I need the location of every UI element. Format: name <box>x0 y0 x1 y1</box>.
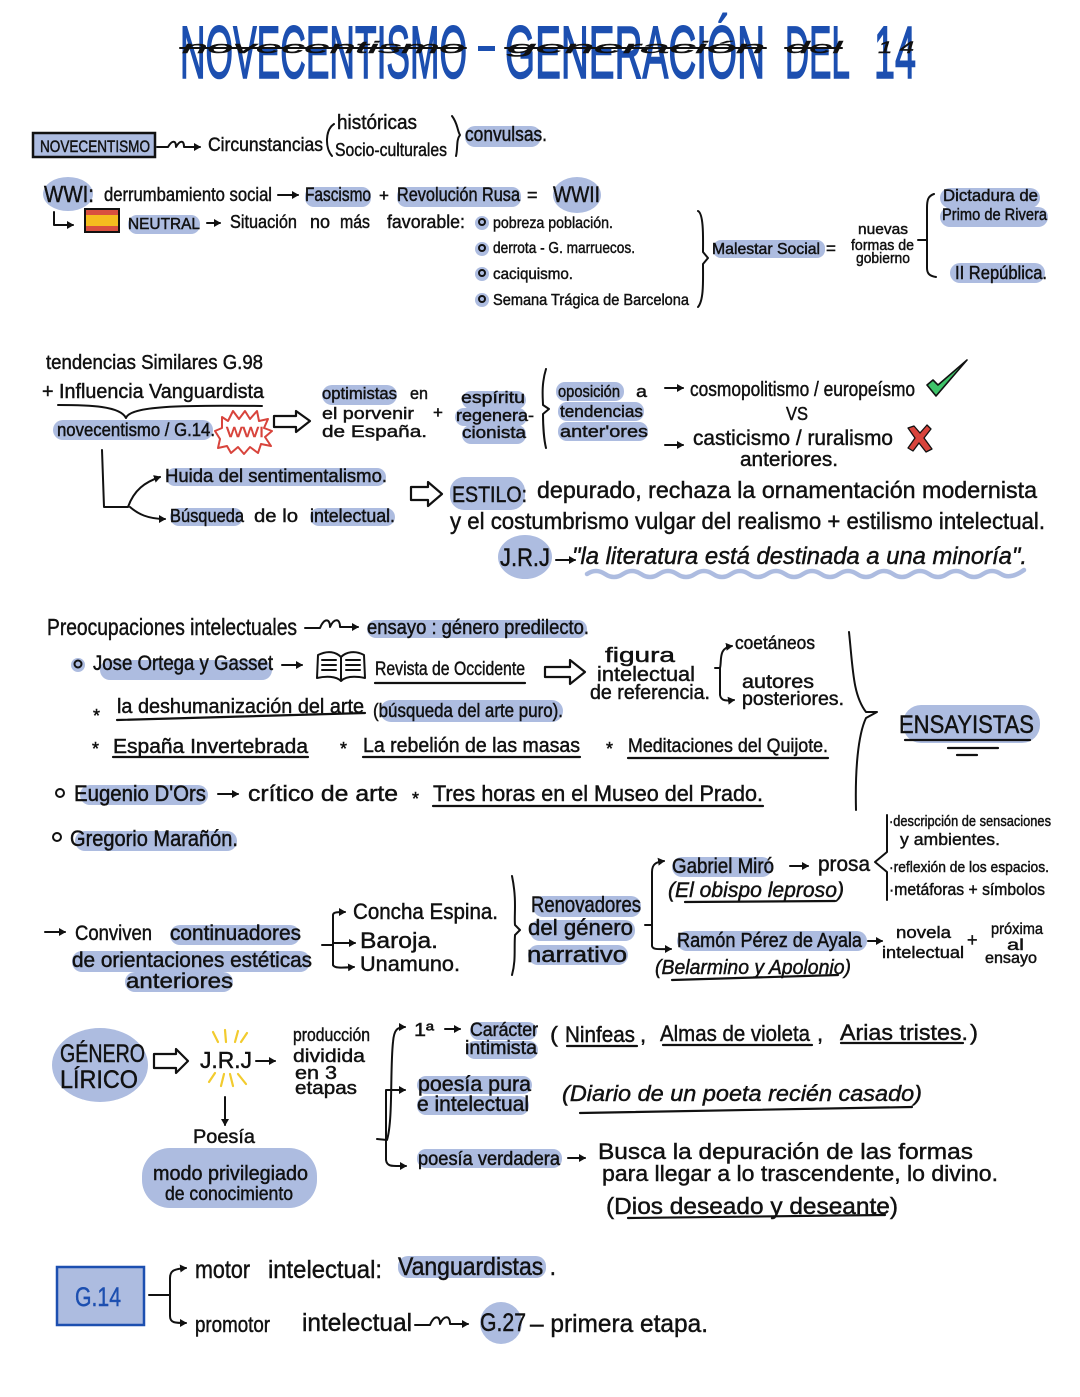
highlighted text: dictadura de primo de rivera <box>940 186 1048 227</box>
title: NOVECENTISMO <box>180 11 467 94</box>
text: critico de arte: crítico de arte <box>248 781 398 806</box>
arrow: to critico <box>218 793 238 795</box>
arrow: down to neutral <box>54 212 73 225</box>
text: circunstancias: Circunstancias <box>208 135 323 156</box>
highlighted text: busqueda del arte puro: (búsqueda del arte puro). <box>373 701 563 722</box>
label box: novecentismo: NOVECENTISMO <box>40 137 150 156</box>
highlighted text: convulsas: convulsas. <box>465 124 547 146</box>
highlighted text: WWII: WWII <box>553 182 600 207</box>
panel: novecentismo circumstances <box>33 112 547 160</box>
text: tendencias similares: tendencias Similares G.98 <box>46 352 263 374</box>
panel: genero lirico <box>52 1020 998 1219</box>
highlighted text: ramon perez de ayala: Ramón Pérez de Ayala <box>677 930 863 952</box>
highlighted text: busqueda: Búsqueda <box>170 506 245 526</box>
bracket: renovadores <box>512 876 520 975</box>
highlighted text: oposicion a tendencias anteriores: tendencias <box>560 402 643 421</box>
highlighted text: renovadores: narrativo <box>527 942 627 967</box>
text: estilo description: y el costumbrismo vulgar del realismo + estilismo intelectual. <box>450 508 1045 534</box>
arrow: poesia verdadera <box>386 1140 406 1166</box>
panel: WWI and neutrality <box>43 177 1048 309</box>
icon: WWI burst: WWI <box>226 424 264 441</box>
text: casticismo ruralismo: casticismo / ruralismo <box>693 427 893 450</box>
text: socio-culturales: Socio-culturales <box>335 140 447 160</box>
text: nuevas formas de gobierno: formas de <box>851 237 914 254</box>
highlighted text: WWII <box>553 177 601 213</box>
text: situacion no mas favorable: más <box>340 212 370 232</box>
arrow: unamuno <box>333 965 354 968</box>
text: figura intelectual de referencia: intelectual <box>597 664 695 686</box>
highlighted text: busqueda: de lo <box>254 506 298 526</box>
highlighted heading: genero lirico: GÉNERO <box>60 1039 145 1068</box>
text: vs: VS <box>786 404 808 424</box>
highlighted text: malestar social: Malestar Social <box>712 241 820 258</box>
arrow: to busca <box>568 1157 585 1159</box>
bracket: forms of government <box>918 194 936 277</box>
arrow: down to poesia <box>224 1097 226 1125</box>
text: autores posteriores <box>742 672 844 710</box>
text: prosa features: y ambientes. <box>900 830 1000 849</box>
highlighted text: espiritu regeneracionista <box>455 388 534 444</box>
text: la deshumanizacion del arte <box>93 696 365 726</box>
text: busca la depuracion: Busca la depuración de las formas <box>598 1139 973 1164</box>
title: del <box>786 38 845 57</box>
arrow: hollow to figura <box>545 660 585 684</box>
arrow: to produccion <box>256 1060 275 1062</box>
text: tres horas: * <box>412 789 419 809</box>
text: situacion no mas favorable: Situación <box>230 212 297 232</box>
text: proxima al ensayo: ensayo <box>985 950 1037 967</box>
highlighted text: WWI <box>43 177 94 211</box>
highlighted text: oposicion a tendencias anteriores <box>556 382 648 441</box>
highlighted text: jose ortega y gasset <box>71 652 273 680</box>
text: ninfeas almas arias: ) <box>970 1020 978 1045</box>
box: G.14 <box>57 1267 144 1325</box>
title: 14 <box>874 11 916 94</box>
highlighted text: poesia pura e intelectual <box>417 1073 532 1116</box>
highlighted pill: modo privilegiado: modo privilegiado <box>153 1163 308 1185</box>
arrow: squiggle to G.27 <box>415 1317 468 1325</box>
text: proxima al ensayo: próxima <box>991 921 1043 938</box>
text: optimistas en el porvenir de espana: en <box>410 384 428 403</box>
bracket: curly brace <box>58 405 262 418</box>
bracket: causes <box>698 211 708 307</box>
text: busca la depuracion: para llegar a lo trascendente, lo divino. <box>602 1161 998 1186</box>
title: generación <box>507 38 765 57</box>
text: primera etapa: – primera etapa. <box>530 1310 708 1338</box>
highlighted text: busqueda: intelectual. <box>310 506 395 526</box>
highlighted text: conviven continuadores: Conviven <box>75 922 152 945</box>
highlighted text: poesia pura e intelectual: poesía pura <box>418 1073 531 1096</box>
highlighted heading: ensayistas: ENSAYISTAS <box>899 711 1034 739</box>
highlighted text: conviven continuadores: de orientaciones estéticas <box>72 949 312 972</box>
highlighted text: JRJ: J.R.J <box>500 544 550 572</box>
list: causes: Semana Trágica de Barcelona <box>493 292 689 309</box>
highlighted text: oposicion a tendencias anteriores: oposición <box>558 382 620 401</box>
arrow: to situacion <box>207 222 220 224</box>
text: anteriores: anteriores. <box>740 449 838 471</box>
icon: spanish flag <box>84 208 120 233</box>
text: intelectual: intelectual <box>302 1309 412 1337</box>
list: causes: caciquismo. <box>493 266 573 283</box>
arrow: hollow to JRJ <box>154 1049 188 1073</box>
highlighted heading: ensayistas <box>899 705 1040 755</box>
text: estilo description <box>450 477 1045 534</box>
text: nuevas formas de gobierno <box>851 221 914 267</box>
text: novela intelectual <box>882 923 964 962</box>
bracket: coetaneos autores <box>715 646 732 668</box>
highlighted text: conviven continuadores: anteriores <box>126 970 233 993</box>
text: nuevas formas de gobierno: nuevas <box>858 221 908 238</box>
panel: tendencias <box>42 352 1045 579</box>
arrow: hollow to optimistas <box>274 411 310 432</box>
highlighted text: poesia verdadera: poesía verdadera <box>418 1149 560 1170</box>
text: poesia: Poesía <box>193 1127 255 1148</box>
arrow: to prosa <box>790 865 808 867</box>
highlighted text: ensayo genero predilecto: ensayo : género predilecto. <box>367 617 589 639</box>
highlighted text: caracter intimista <box>465 1020 539 1059</box>
text: figura intelectual de referencia <box>590 645 710 704</box>
text: revista de occidente: Revista de Occidente <box>375 659 525 680</box>
title: DEL <box>785 11 850 94</box>
highlighted text: fascismo: Fascismo <box>305 185 371 206</box>
text: belarmino y apolonio: (Belarmino y Apolonio) <box>655 957 851 979</box>
text: baroja: Baroja. <box>360 928 438 953</box>
highlighted text: conviven continuadores: continuadores <box>170 922 301 945</box>
text: proxima al ensayo: al <box>1007 937 1024 954</box>
text: optimistas en el porvenir de espana: optimistas <box>322 384 397 403</box>
text: prosa: prosa <box>818 853 870 876</box>
arrow: branch lower <box>130 507 165 519</box>
text: prosa features: ·metáforas + símbolos <box>889 880 1045 899</box>
label box: novecentismo <box>33 133 155 157</box>
bracket: etapas <box>377 1027 405 1140</box>
highlighted text: oposicion a tendencias anteriores: a <box>636 382 648 401</box>
highlighted text: renovadores: Renovadores <box>531 892 641 917</box>
text: first stage <box>414 1020 460 1040</box>
highlighted text: renovadores <box>527 892 641 967</box>
text: motor intelectual <box>195 1256 382 1284</box>
text: motor intelectual: motor <box>195 1256 250 1284</box>
arrow: to promotor <box>170 1295 186 1323</box>
bracket: prosa features <box>875 815 887 900</box>
highlighted text: novecentismo G.14: novecentismo / G.14. <box>57 420 215 440</box>
text: autores posteriores: posteriores. <box>742 689 844 710</box>
text: situacion no mas favorable: no <box>310 212 330 232</box>
highlighted text: estilo: ESTILO: <box>452 482 527 507</box>
highlighted text: II republica: II República. <box>955 263 1047 283</box>
highlighted text: WWI: WWI: <box>44 181 94 207</box>
icon: open book <box>317 652 365 681</box>
bracket: oposicion <box>543 369 549 448</box>
text: la rebelion de las masas: * <box>340 739 347 759</box>
bracket: lower branch <box>720 668 734 700</box>
bracket: left <box>327 124 334 156</box>
text: derrumbamiento social: derrumbamiento social <box>104 185 272 206</box>
text: situacion no mas favorable <box>230 212 465 232</box>
text: diario de un poeta: (Diario de un poeta recién casado) <box>562 1081 922 1106</box>
highlighted text: G.27: G.27 <box>480 1309 526 1337</box>
icon: JRJ with rays <box>200 1030 252 1086</box>
arrow: concha espina <box>333 912 345 915</box>
arrow: to quote <box>556 559 575 561</box>
arrow: to novela <box>868 940 882 942</box>
text: plus: + <box>967 930 978 950</box>
highlighted text: poesia pura e intelectual: e intelectual <box>417 1093 529 1116</box>
highlighted text: dictadura de primo de rivera: Primo de Rivera <box>942 205 1047 224</box>
text: dios deseado y deseante: (Dios deseado y deseante) <box>606 1193 898 1219</box>
text: equals: = <box>527 185 538 205</box>
text: concha espina: Concha Espina. <box>353 899 498 924</box>
text: la deshumanizacion del arte: la deshumanización del arte <box>117 696 364 718</box>
text: unamuno: Unamuno. <box>360 953 460 976</box>
text: equals: = <box>214 1147 230 1169</box>
text: historicas: históricas <box>337 112 417 134</box>
icon: WWI burst <box>215 411 272 454</box>
arrow: to fascismo <box>278 194 298 196</box>
highlighted heading: genero lirico <box>52 1028 148 1102</box>
text: ninfeas almas arias: ( <box>550 1022 559 1047</box>
text: novela intelectual: intelectual <box>882 943 964 962</box>
text: optimistas en el porvenir de espana <box>322 384 428 441</box>
highlighted text: gregorio maranon: Gregorio Marañón. <box>70 826 238 851</box>
text: figura intelectual de referencia: de referencia. <box>590 682 710 704</box>
text: optimistas en el porvenir de espana: el porvenir <box>322 404 414 423</box>
text: produccion dividida: producción <box>293 1025 370 1045</box>
box: G.14: G.14 <box>75 1282 121 1312</box>
text: la rebelion de las masas: La rebelión de las masas <box>363 735 580 757</box>
text: ninfeas almas arias <box>550 1020 978 1047</box>
title: GENERACIÓN <box>505 11 765 94</box>
text: motor intelectual: intelectual: <box>268 1256 382 1284</box>
text: meditaciones del quijote: * <box>606 739 613 759</box>
highlighted text: estilo <box>450 477 527 510</box>
text: equals: = <box>826 239 836 258</box>
text: autores posteriores: autores <box>742 672 814 693</box>
highlighted text: espiritu regeneracionista: cionista <box>462 423 527 442</box>
arrow: poesia pura <box>386 1090 405 1140</box>
text: produccion dividida: en 3 <box>295 1063 337 1083</box>
text: preocupaciones intelectuales: Preocupaciones intelectuales <box>47 614 297 640</box>
arrow: baroja <box>333 942 355 944</box>
text: ninfeas almas arias: Ninfeas <box>565 1022 635 1047</box>
text: la deshumanizacion del arte: * <box>93 706 100 726</box>
highlighted text: oposicion a tendencias anteriores: anter'ores <box>560 422 648 441</box>
highlighted text: espiritu regeneracionista: regenera- <box>456 406 534 425</box>
text: prosa features: ·descripción de sensaciones <box>889 813 1051 830</box>
bracket: right <box>452 116 460 156</box>
bracket: ensayistas <box>849 632 877 810</box>
list: causes <box>475 215 689 309</box>
text: nuevas formas de gobierno: gobierno <box>856 250 910 267</box>
highlighted pill: modo privilegiado: de conocimiento <box>165 1184 293 1205</box>
text: promotor: promotor <box>195 1312 270 1337</box>
arrow: squiggle to circumstances <box>157 142 200 147</box>
arrow: ayala <box>652 925 671 949</box>
highlighted text: espiritu regeneracionista: espíritu <box>461 388 525 407</box>
text: espana invertebrada: * <box>92 739 99 759</box>
text: coetaneos: coetáneos <box>735 633 815 653</box>
text: first stage: 1ª <box>414 1020 434 1040</box>
arrow: to revista <box>282 664 302 666</box>
text: produccion dividida <box>293 1025 370 1098</box>
arrow: squiggle to ensayo <box>305 620 358 628</box>
text: prosa features <box>889 813 1051 899</box>
arrow: hollow to estilo <box>411 482 442 506</box>
panel: narrativa <box>45 813 1051 993</box>
text: ninfeas almas arias: Arias tristes. <box>840 1020 968 1045</box>
highlighted text: renovadores: del género <box>528 915 633 940</box>
title: 1 4 <box>878 38 914 57</box>
highlighted text: JRJ <box>498 535 552 579</box>
arrow: to conviven <box>45 931 65 933</box>
text: ninfeas almas arias: , <box>817 1021 823 1046</box>
icon: red cross <box>908 425 932 452</box>
highlighted text: eugenio dors: Eugenio D'Ors <box>74 781 206 806</box>
highlighted text: caracter intimista: Carácter <box>470 1020 539 1041</box>
text: espana invertebrada: España Invertebrada <box>113 736 309 758</box>
text: novela intelectual: novela <box>896 923 952 942</box>
text: el obispo leproso: (El obispo leproso) <box>668 879 844 902</box>
list: causes: pobreza población. <box>493 215 613 232</box>
title: novecentismo <box>182 38 465 57</box>
text: produccion dividida: etapas <box>295 1078 357 1098</box>
highlighted heading: genero lirico: LÍRICO <box>60 1065 138 1094</box>
highlighted text: huida: Huida del sentimentalismo. <box>165 466 387 486</box>
arrow: branch to sentimentalismo and intelectual <box>102 450 160 507</box>
text: cosmopolitismo europeismo: cosmopolitismo / europeísmo <box>690 379 915 401</box>
highlighted pill: modo privilegiado <box>142 1148 317 1208</box>
text: produccion dividida: dividida <box>293 1046 366 1066</box>
highlighted text: gabriel miro: Gabriel Miró <box>672 855 774 878</box>
bracket: motor and promotor <box>149 1268 186 1295</box>
highlighted text: jose ortega y gasset: Jose Ortega y Gasset <box>93 652 273 675</box>
text: plus: + <box>433 403 443 422</box>
text: estilo description: depurado, rechaza la ornamentación modernista <box>537 477 1037 503</box>
highlighted text: neutral: NEUTRAL <box>128 216 200 233</box>
panel: ensayistas <box>47 614 1040 851</box>
icon: green check <box>927 360 967 396</box>
text: situacion no mas favorable: favorable: <box>387 212 465 232</box>
highlighted text: dictadura de primo de rivera: Dictadura de <box>943 186 1038 205</box>
text: quote: "la literatura está destinada a una minoría". <box>572 543 1027 570</box>
text: meditaciones del quijote: Meditaciones del Quijote. <box>628 736 828 757</box>
icon: JRJ with rays: J.R.J <box>200 1047 252 1073</box>
highlighted text: vanguardistas: Vanguardistas . <box>398 1253 556 1281</box>
text: influencia vanguardista: + Influencia Vanguardista <box>42 381 265 403</box>
text: prosa features: ·reflexión de los espacios. <box>889 859 1049 876</box>
text: ninfeas almas arias: Almas de violeta <box>660 1021 811 1046</box>
text: tres horas: Tres horas en el Museo del Prado. <box>433 781 763 806</box>
highlighted text: G.27 <box>480 1302 526 1344</box>
text: proxima al ensayo <box>985 921 1043 967</box>
wavy highlight <box>587 570 1024 577</box>
text: ninfeas almas arias: , <box>640 1022 646 1047</box>
text: optimistas en el porvenir de espana: de España. <box>322 422 427 441</box>
highlighted text: caracter intimista: intimista <box>465 1038 537 1059</box>
list: causes: derrota - G. marruecos. <box>493 240 635 257</box>
highlighted text: busqueda <box>170 506 395 526</box>
highlighted text: conviven continuadores <box>72 922 312 993</box>
bracket: authors <box>322 915 333 965</box>
highlighted text: revolucion rusa: Revolución Rusa <box>397 185 520 206</box>
bracket: miro and ayala <box>645 861 664 925</box>
text: figura intelectual de referencia: figura <box>605 645 676 667</box>
panel: G.14 <box>57 1253 708 1344</box>
text: plus: + <box>379 186 389 205</box>
text: busca la depuracion <box>598 1139 998 1186</box>
